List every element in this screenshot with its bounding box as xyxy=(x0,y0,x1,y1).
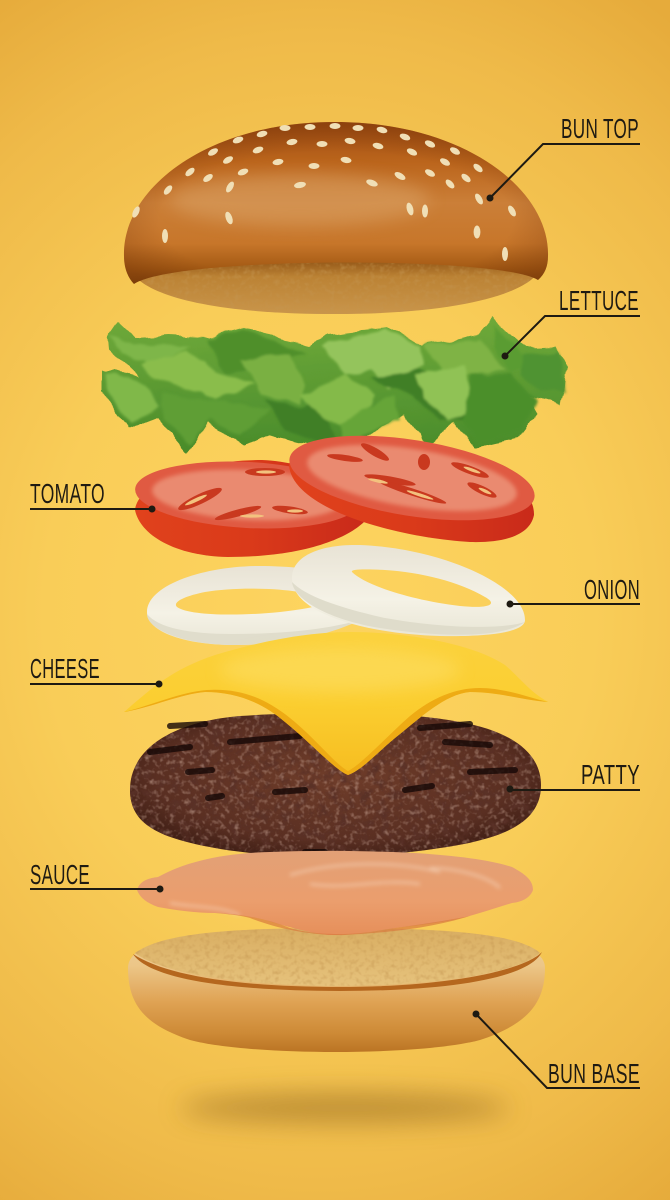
sauce xyxy=(137,851,533,935)
bun top xyxy=(124,122,548,314)
sesame seeds xyxy=(131,123,518,261)
cheese slice xyxy=(124,632,548,775)
onion ring right xyxy=(292,545,525,636)
label: sauce xyxy=(30,859,164,892)
label: patty xyxy=(506,759,640,792)
label: cheese: CHEESE xyxy=(30,653,100,684)
bun base xyxy=(128,928,545,1052)
label: sauce: SAUCE xyxy=(30,859,90,890)
label: onion xyxy=(506,574,640,608)
beef patty xyxy=(130,713,541,856)
tomato slice left xyxy=(133,456,364,557)
floor shadow xyxy=(180,1093,510,1123)
onion ring left xyxy=(147,566,372,645)
label: bun base xyxy=(472,1010,640,1089)
label: bun top xyxy=(486,113,640,202)
label: patty: PATTY xyxy=(581,759,640,790)
label: tomato: TOMATO xyxy=(30,478,105,509)
label: lettuce xyxy=(502,285,640,360)
lettuce xyxy=(103,318,568,458)
tomato slice right xyxy=(284,421,540,542)
